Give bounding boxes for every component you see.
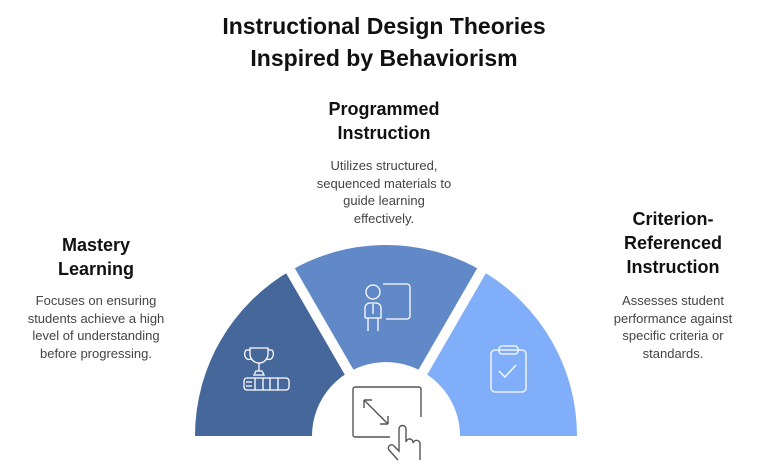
heading: mastery learning: Mastery [62,235,130,255]
text: mastery learning: Focuses on ensuring [36,293,156,308]
icon: trophy and book [244,348,289,390]
text: programmed instruction: effectively. [354,210,414,226]
title: Inspired by Behaviorism [250,45,518,71]
icon: clipboard check [491,346,526,392]
text: mastery learning [28,293,164,360]
segment: criterion-referenced [423,271,577,436]
heading: criterion-referenced instruction [624,209,722,277]
text: mastery learning: before progressing. [40,346,152,360]
icon: teacher at board [365,284,410,331]
text: mastery learning: students achieve a high [28,310,164,326]
heading: criterion-referenced instruction: Referenced [624,233,722,253]
text: programmed instruction: sequenced materials to [317,176,451,190]
text: criterion-referenced instruction: Assesses student [622,293,724,308]
heading: criterion-referenced instruction: Criterion- [632,209,714,229]
icon: resize hand [353,387,421,460]
text: criterion-referenced instruction: performance against [614,310,732,326]
text: mastery learning: level of understanding [32,328,160,343]
text: programmed instruction [317,158,451,226]
segment: programmed instruction [290,245,482,372]
heading: criterion-referenced instruction: Instruction [626,257,720,277]
text: programmed instruction: Utilizes structured, [331,158,437,173]
segment: mastery learning [195,271,349,436]
title: Instructional Design Theories [222,13,546,39]
heading: programmed instruction: Instruction [338,123,430,143]
heading: mastery learning: Learning [58,259,134,279]
text: criterion-referenced instruction [614,293,732,360]
text: criterion-referenced instruction: standards. [643,346,703,360]
heading: programmed instruction [328,99,440,143]
heading: programmed instruction: Programmed [328,99,440,119]
text: criterion-referenced instruction: specific criteria or [622,328,724,343]
text: programmed instruction: guide learning [343,193,425,208]
heading: mastery learning [58,235,134,279]
title [222,13,546,71]
